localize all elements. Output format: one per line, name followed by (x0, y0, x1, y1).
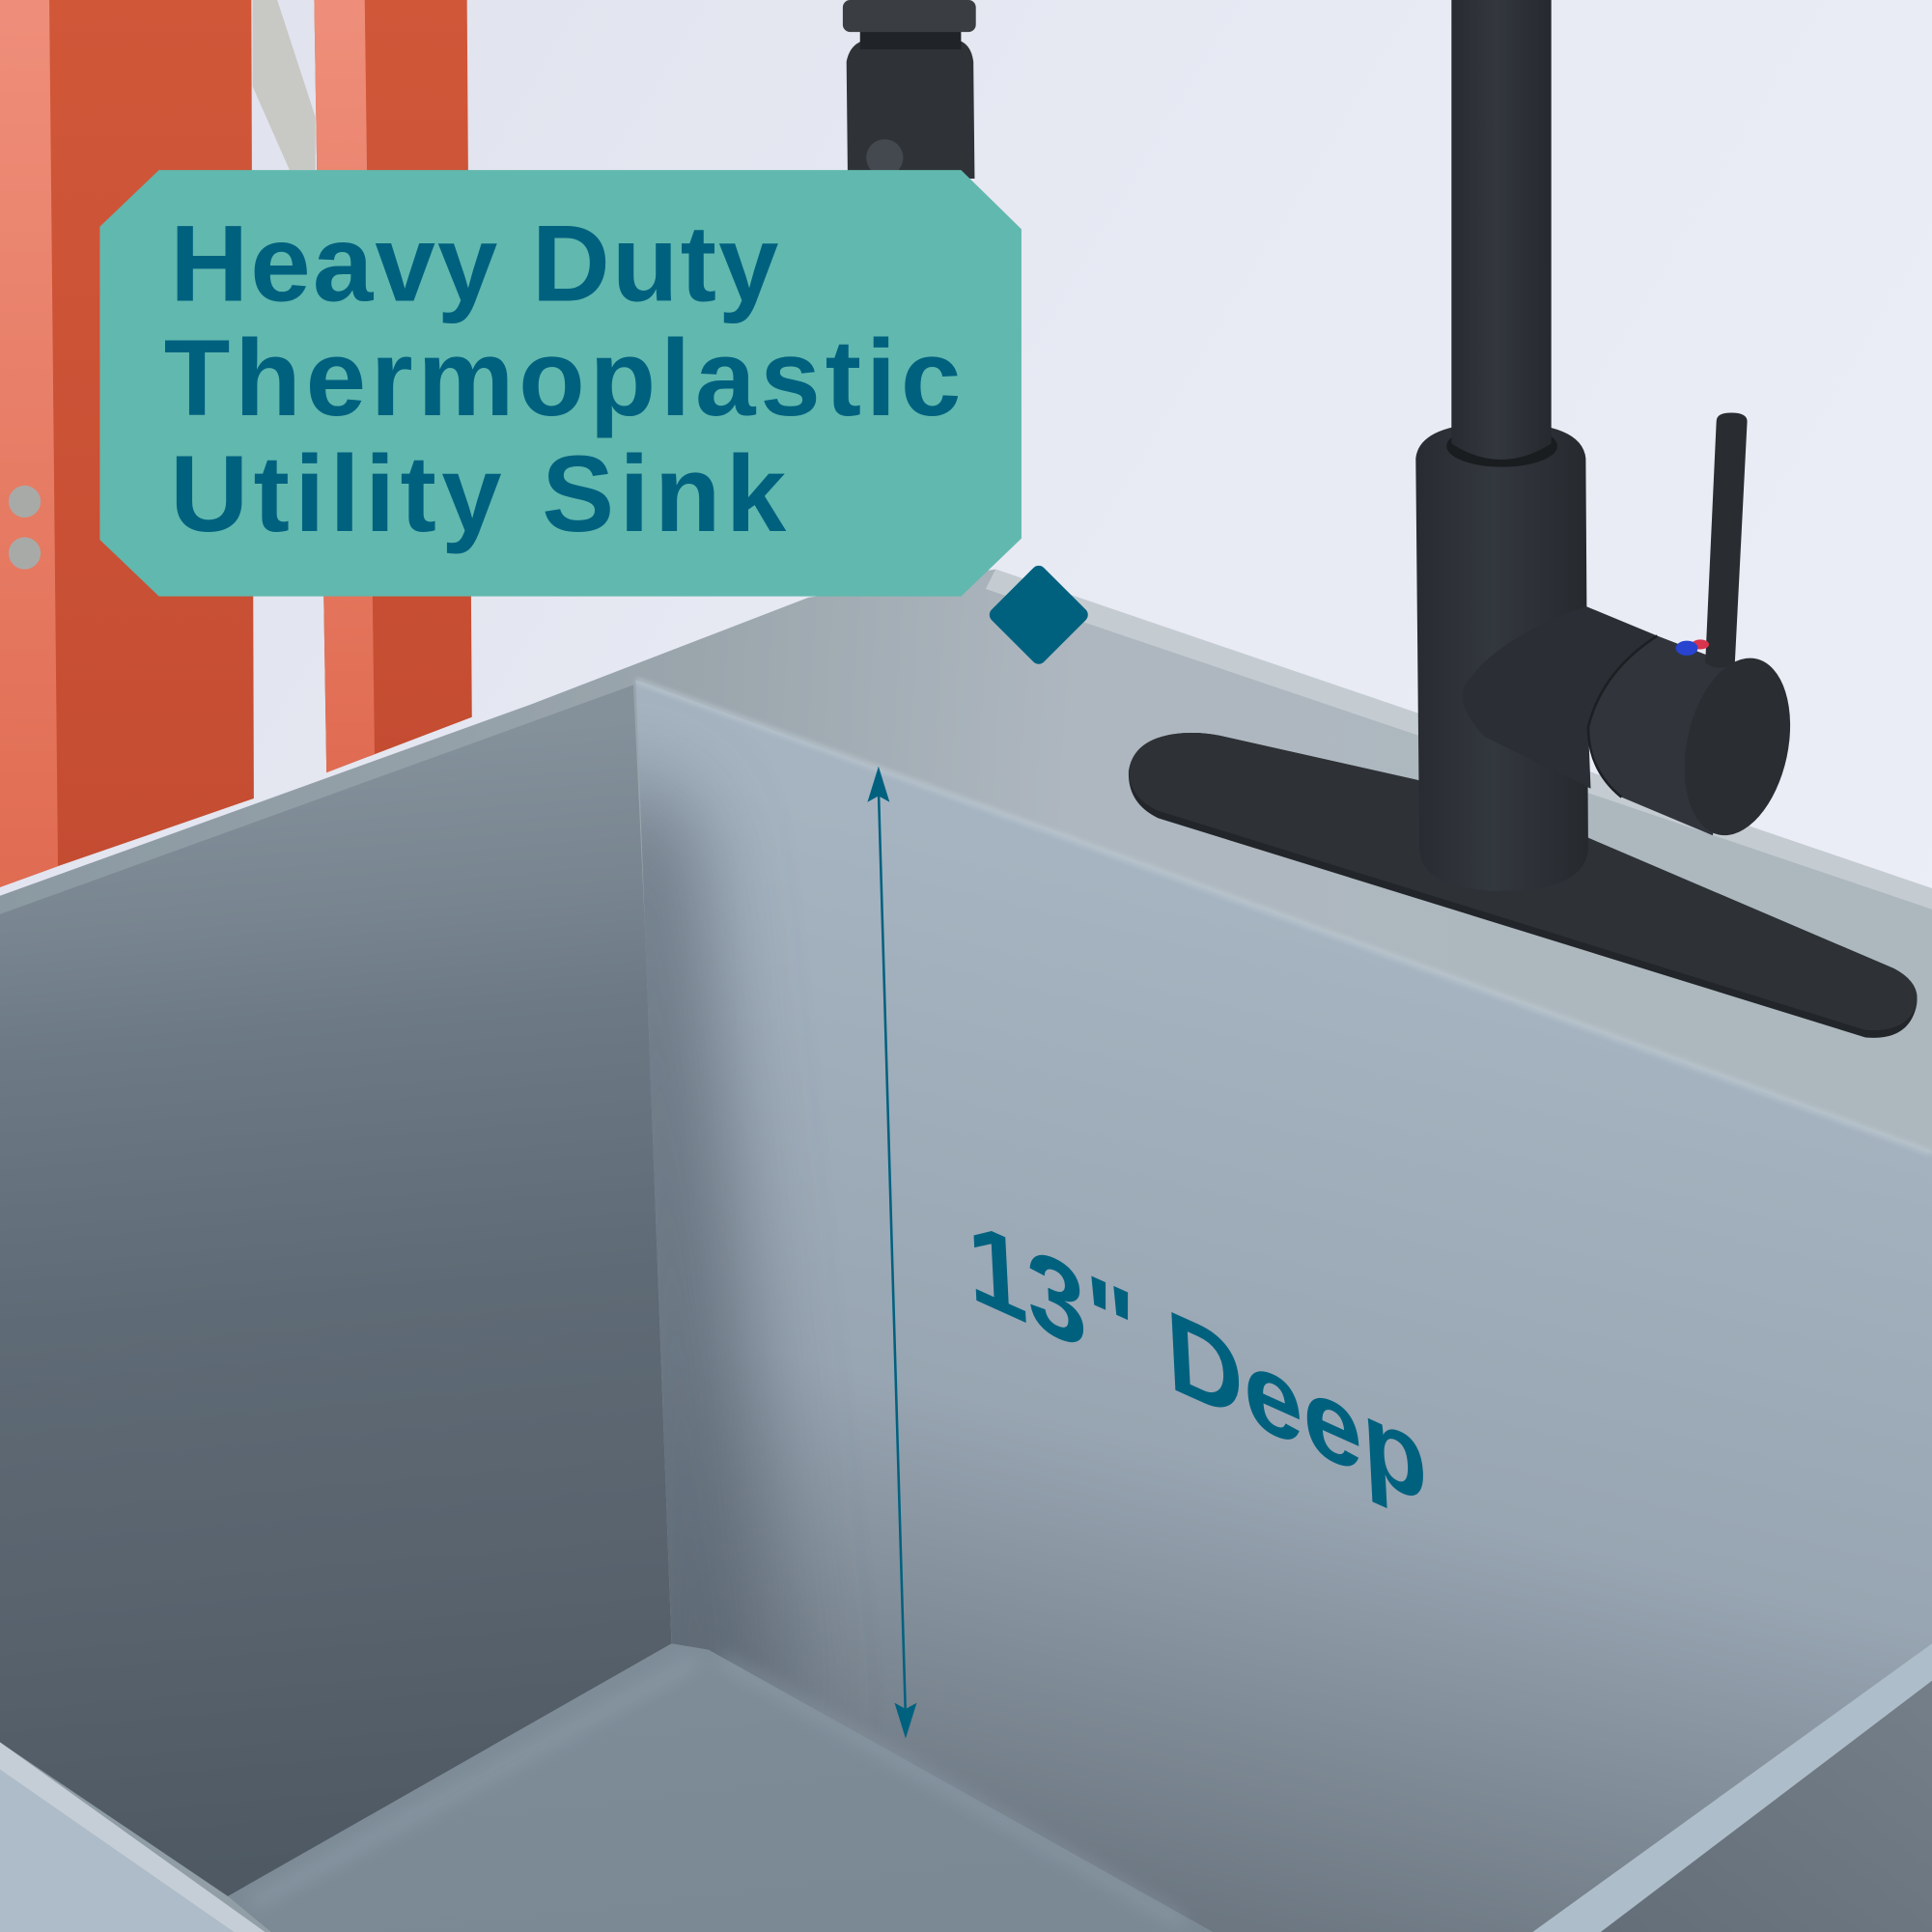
basin left wall (0, 686, 672, 1896)
depth label: 13" Deep (965, 1195, 1430, 1528)
depth arrow (867, 767, 916, 1739)
rim back lip (986, 570, 1932, 910)
faucet spout column (1451, 0, 1552, 460)
title text (164, 202, 961, 554)
orange ladder (0, 0, 472, 887)
diamond marker (987, 563, 1091, 667)
handle groove (1588, 635, 1657, 798)
faucet (1415, 0, 1806, 891)
front right rim edge (1533, 1643, 1932, 1932)
basin back wall (635, 680, 1932, 1932)
faucet body (1415, 423, 1588, 891)
title text: Heavy Duty (170, 202, 779, 323)
title text: Thermoplastic (164, 317, 961, 438)
basin floor (228, 1643, 1213, 1932)
collar ring (1446, 425, 1557, 467)
floor edge highlights (253, 1659, 1183, 1922)
title banner (99, 170, 1022, 597)
handle cylinder (1588, 635, 1750, 835)
deck plate (1129, 733, 1918, 1038)
rim inner highlight (635, 680, 1932, 1153)
handle end cap (1669, 648, 1806, 845)
sink rim (0, 570, 1932, 1932)
back wall corner shadow (638, 742, 811, 1695)
faucet spray head (843, 0, 976, 179)
title text: Utility Sink (170, 433, 787, 554)
front left rim (0, 1742, 265, 1932)
handle lever (1705, 413, 1748, 668)
temperature dots (1676, 639, 1709, 656)
front right wall (1601, 1681, 1932, 1932)
handle neck (1463, 606, 1657, 789)
front left rim lip (0, 1742, 265, 1932)
